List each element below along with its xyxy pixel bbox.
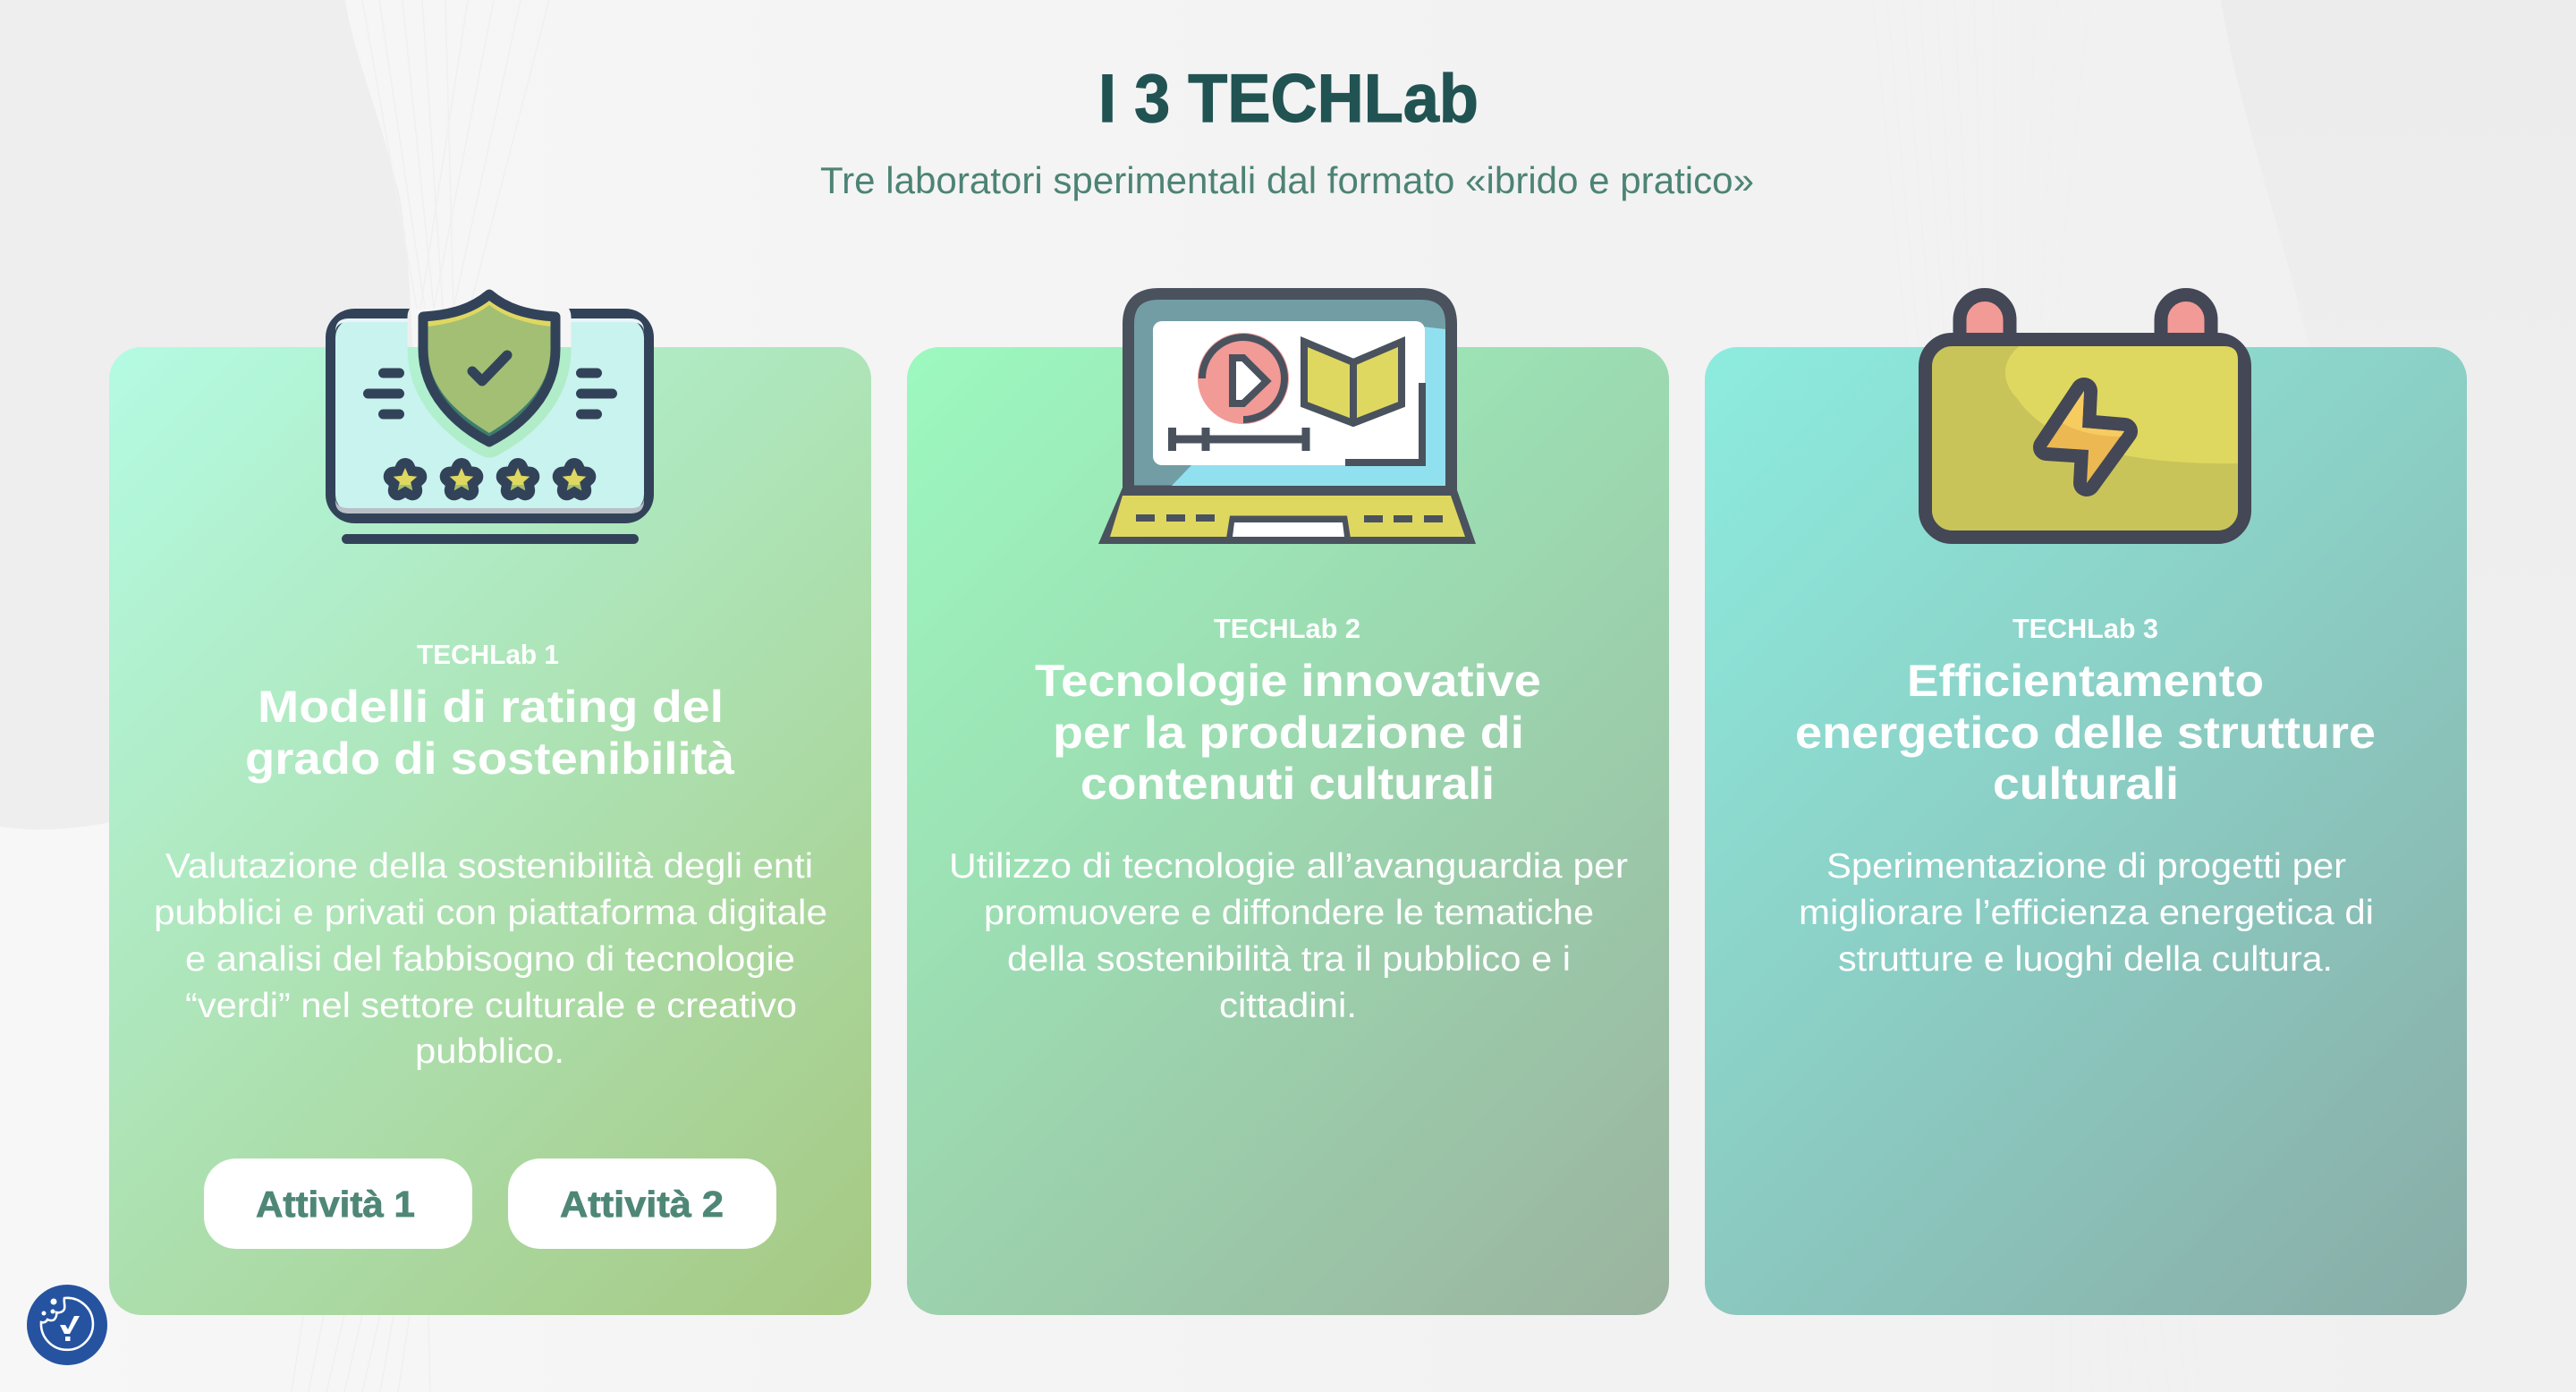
label: TECHLab 2: TECHLab 2 — [1214, 613, 1360, 644]
description: TECHLab 1: Valutazione della sostenibilità degli enti — [165, 847, 813, 886]
heading: TECHLab 2: per la produzione di — [1053, 708, 1524, 758]
button: Attività 2: Attività 2 — [560, 1184, 724, 1225]
description: TECHLab 2: promuovere e diffondere le tematiche — [984, 894, 1594, 932]
icon: battery with lightning bolt — [1925, 295, 2245, 537]
label: TECHLab 3: TECHLab 3 — [2012, 613, 2158, 644]
heading: TECHLab 3: Efficientamento — [1907, 656, 2264, 706]
heading: TECHLab 3: energetico delle strutture — [1795, 708, 2376, 758]
label: TECHLab 1: TECHLab 1 — [417, 639, 559, 670]
subtitle: Tre laboratori sperimentali dal formato «ibrido e pratico» — [820, 159, 1754, 201]
heading: TECHLab 1 — [245, 682, 734, 784]
button: Attività 2 — [508, 1159, 776, 1249]
panel: TECHLab 3 — [1705, 295, 2467, 1315]
title: I 3 TECHLab — [1098, 61, 1479, 137]
description: TECHLab 3 — [1799, 847, 2374, 979]
heading: TECHLab 1: Modelli di rating del — [258, 682, 724, 732]
description: TECHLab 3: Sperimentazione di progetti per — [1826, 847, 2346, 886]
description: TECHLab 2: cittadini. — [1219, 987, 1357, 1025]
heading: TECHLab 2 — [1035, 656, 1541, 809]
card background 2 — [907, 347, 1669, 1315]
description: TECHLab 1: pubblico. — [415, 1032, 564, 1071]
description: TECHLab 1: pubblici e privati con piattaforma digitale — [154, 894, 827, 932]
panel: TECHLab 2 — [907, 293, 1669, 1315]
heading: TECHLab 1: grado di sostenibilità — [245, 734, 734, 784]
button: Attività 1 — [204, 1159, 472, 1249]
description: TECHLab 2: della sostenibilità tra il pubblico e i — [1007, 940, 1571, 979]
button: Attività 1: Attività 1 — [256, 1184, 415, 1225]
description: TECHLab 2 — [949, 847, 1628, 1025]
heading: TECHLab 3 — [1795, 656, 2376, 809]
description: TECHLab 3: migliorare l’efficienza energetica di — [1799, 894, 2374, 932]
icon: rating shield on monitor — [331, 294, 649, 539]
description: TECHLab 1: e analisi del fabbisogno di tecnologie — [185, 940, 795, 979]
heading: TECHLab 3: culturali — [1993, 759, 2179, 809]
heading: TECHLab 2: Tecnologie innovative — [1035, 656, 1541, 706]
icon: cookie consent badge — [27, 1285, 107, 1365]
panel: TECHLab 1 — [109, 294, 871, 1315]
description: TECHLab 1: “verdi” nel settore culturale e creativo — [185, 987, 797, 1025]
description: TECHLab 2: Utilizzo di tecnologie all’avanguardia per — [949, 847, 1628, 886]
card background 1 — [109, 347, 871, 1315]
description: TECHLab 1 — [154, 847, 827, 1071]
icon: laptop with video and book — [1098, 293, 1476, 544]
description: TECHLab 3: strutture e luoghi della cultura. — [1838, 940, 2333, 979]
heading: TECHLab 2: contenuti culturali — [1080, 759, 1495, 809]
card background 3 — [1705, 347, 2467, 1315]
